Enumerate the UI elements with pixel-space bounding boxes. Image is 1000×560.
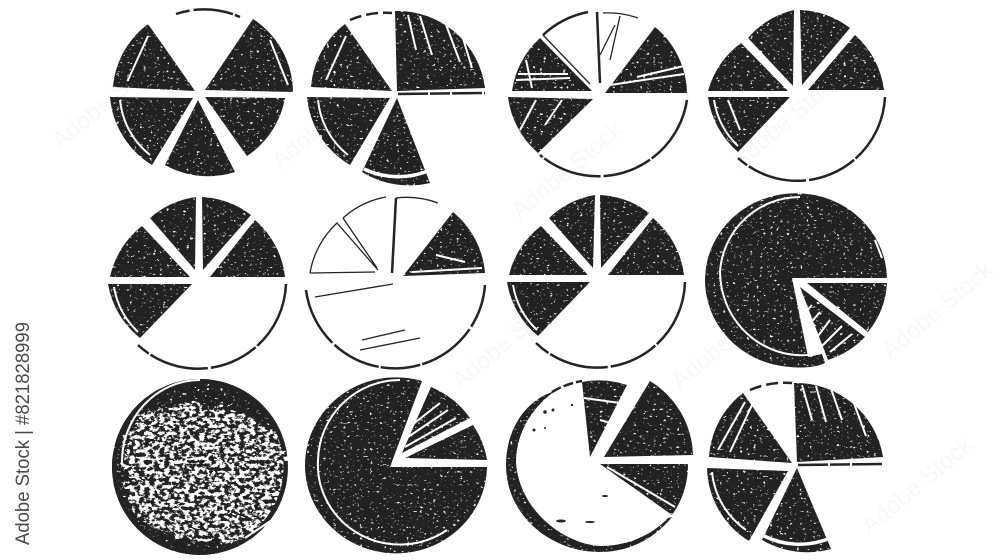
pie chart 12: four dark slices, one gap	[707, 383, 884, 552]
pie chart 5: four top slices and one lower left	[108, 197, 286, 369]
pie chart 1: five dark slices	[110, 9, 293, 176]
pie chart 10: dark with two upper right slices	[305, 377, 487, 553]
pie chart 9: full circle, heavily worn	[112, 379, 288, 555]
pie chart 8: nearly full dark with striped cut slices	[705, 193, 887, 368]
pie chart 7: four top slices and one lower left	[507, 195, 685, 368]
watermark: faint stock text: Adobe Stock	[857, 431, 979, 540]
watermark: faint stock text: Adobe Stock	[267, 66, 389, 175]
pie chart 3: three dark slices	[508, 12, 687, 176]
pie chart 11: white with three dark right slices	[506, 380, 693, 552]
pie chart 4: four top slices and one lower left	[708, 10, 885, 181]
stock id caption: Adobe Stock | #821828999	[13, 322, 34, 545]
pie chart 2: four dark slices, one gap	[307, 11, 485, 185]
watermark: faint stock text: Adobe Stock	[727, 66, 849, 175]
watermark: faint stock text: Adobe Stock	[877, 256, 999, 365]
watermark: faint stock text: Adobe Stock	[507, 116, 629, 225]
watermark: faint stock text: Adobe Stock	[47, 46, 169, 155]
watermark: faint stock text: Adobe Stock	[447, 286, 569, 395]
specks: scattered ink marks	[532, 404, 608, 523]
pie chart 6: one dark slice with outlined rest	[306, 197, 485, 368]
watermark: faint stock text: Adobe Stock	[667, 286, 789, 395]
